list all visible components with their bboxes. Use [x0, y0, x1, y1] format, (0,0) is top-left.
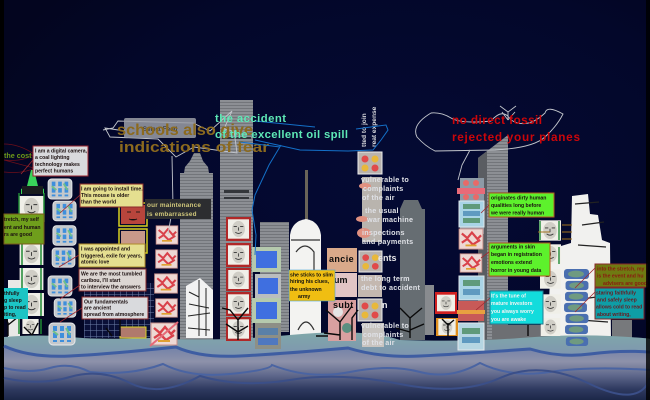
icon: spire top: [21, 170, 44, 194]
vertical text: attempted to join: tted to join: [361, 113, 368, 147]
column: patterned tiles with words: [327, 248, 357, 341]
text block: tower captions: inspections: [362, 228, 405, 237]
column: red framed faces: [226, 217, 251, 341]
callout: tumbled: [79, 269, 146, 291]
column: green and blue disc stack: [564, 269, 589, 346]
column: patterned tiles with words: subt: [333, 300, 354, 310]
lower sea: [4, 346, 650, 400]
callout: into the stretch: is the event and hu: [597, 274, 644, 280]
vertical text: attempted to join: [361, 106, 378, 147]
column: patterned tiles with words: um: [334, 275, 348, 285]
building: far-right grey block: [612, 320, 632, 338]
text block: tower captions: n: [382, 300, 388, 310]
callout: fundamentals: [82, 297, 148, 319]
callout: originates: we were really human: [490, 210, 544, 216]
building: stepped tower: [180, 153, 213, 340]
callout: arguments: arguments in skin: [491, 244, 535, 250]
callout: digital camera: perfect humans: [35, 168, 73, 174]
callout: originates: [489, 193, 554, 217]
select feed button: Select Feed: [143, 126, 178, 133]
callout: mature investors: [490, 291, 543, 324]
wave band 3: [4, 370, 650, 395]
text block: tower captions: debt to accident: [361, 283, 420, 292]
text block: tower captions: ents: [378, 253, 397, 263]
callout: fundamentals: spread from atmosphere: [84, 312, 144, 318]
column: central text tower: [356, 152, 384, 347]
callout: digital camera: technology makes: [35, 162, 80, 168]
callout: install time: I am going to install time.: [81, 186, 143, 192]
callout: staring faithfully: about writing,: [597, 312, 631, 318]
text block: tower captions: the usual: [365, 206, 399, 215]
column: right pink and teal stack: [456, 178, 485, 350]
callout: digital camera: I am a digital camera,: [35, 148, 88, 154]
callout: fundamentals: are ancient: [84, 306, 111, 312]
callout: our maintenance: our maintenance: [147, 202, 201, 209]
wave band 2: [4, 363, 650, 375]
callout: arguments: emotions extend: [491, 260, 532, 266]
callout: stretch: ent and human: [4, 225, 41, 231]
callout: tumbled: We are the most tumbled: [81, 272, 142, 278]
heading: the accident: the accident: [215, 113, 286, 125]
callout: staring faithfully: and safely sleep: [597, 298, 637, 304]
callout: she sticks: the unknown: [290, 287, 322, 293]
building: grey right-centre block: [492, 325, 552, 340]
callout: appointed: I was appointed and: [81, 246, 130, 252]
callout: she sticks: army: [298, 294, 310, 300]
callout: faithfully left: p to read: [4, 305, 26, 311]
sketch outline cloud: right: [416, 106, 563, 180]
callout: staring faithfully: [595, 288, 644, 319]
callout: staring faithfully: staring faithfully: [596, 290, 636, 296]
heading: of the excellent oil spill: of the excellent oil spill: [215, 129, 348, 141]
callout: arguments: began in registration: [491, 252, 542, 258]
callout: tumbled: to interview the answers: [81, 284, 141, 290]
text block: tower captions: [361, 175, 420, 347]
text block: tower captions: vulnerable to: [361, 321, 409, 330]
text block: tower captions: of the air: [362, 338, 395, 347]
bare black trees: [4, 306, 534, 340]
column: red scribble cells: [150, 226, 178, 346]
text block: tower captions: vulnerable to: [361, 175, 409, 184]
building: white rocket tower: [290, 170, 321, 340]
callout: mature investors: mature investors: [491, 301, 533, 307]
column: small faces left of right stack: [435, 292, 458, 336]
building: slanted tower: [478, 135, 508, 341]
callout: faithfully left: thfully: [4, 291, 20, 297]
skyline buildings: [8, 100, 632, 341]
select feed button: [124, 118, 196, 138]
column: right faces: [538, 220, 572, 336]
wave band 1: [4, 346, 650, 356]
text block: tower captions: the long term: [361, 274, 410, 283]
callout: she sticks: [289, 270, 335, 301]
left black edge: [0, 0, 4, 400]
column: patterned tiles with words: ancie: [329, 254, 354, 264]
callout: stretch: tretch, my self: [4, 217, 39, 223]
callout: faithfully left: iting,: [4, 312, 17, 318]
callout: the cost: the cost: [4, 151, 32, 160]
building: white jagged block: [539, 194, 611, 340]
connector lines: [21, 160, 595, 322]
building: left white block: [8, 280, 20, 338]
building: grey mid block: [260, 222, 289, 332]
building: slate tower: [400, 200, 434, 340]
text block: tower captions: war machine: [366, 215, 413, 224]
callout: install time: than the world: [81, 200, 116, 206]
right edge shadow: [646, 0, 650, 400]
callout: mature investors: you always worry: [491, 309, 534, 315]
building: white striped block: [186, 278, 213, 338]
column: green spire with faces: [19, 170, 44, 334]
callout: faithfully left: g sleep: [4, 298, 22, 304]
callout: arguments: [489, 243, 550, 276]
heading: rejected your planes: rejected your planes: [452, 130, 580, 144]
callout: staring faithfully: allows cold to read: [596, 304, 642, 310]
heading: no direct fossil: no direct fossil: [452, 113, 542, 127]
text block: tower captions: complaints: [363, 330, 403, 339]
callout: install time: [80, 184, 143, 207]
callout: into the stretch: [595, 264, 647, 287]
callout: mature investors: you are awake: [491, 317, 526, 323]
text block: tower captions: and payments: [362, 237, 413, 246]
callout: originates: originates dirty human: [491, 196, 546, 202]
callout: stretch: [4, 214, 44, 244]
text block: tower captions: complaints: [363, 184, 403, 193]
sketch outline cloud: left: [103, 111, 237, 234]
building: blue grid block: [84, 283, 154, 338]
callout: into the stretch: into the stretch, my: [597, 266, 645, 272]
callout: appointed: atomic love: [81, 260, 109, 266]
water: [4, 332, 650, 400]
column: bright blue cells: [252, 247, 281, 349]
callout: into the stretch: advisers are good: [603, 281, 647, 287]
callout: mature investors: It's the tune of: [491, 294, 526, 300]
callout: our maintenance: is embarrassed: [147, 211, 197, 218]
callout: faithfully left: [4, 288, 28, 319]
callout: digital camera: [33, 146, 88, 176]
blue scribble line: [240, 121, 388, 255]
column: yellow framed faces: [119, 203, 147, 338]
heading: schools also give: schools also give: [117, 122, 253, 139]
callout: appointed: [79, 244, 145, 267]
callout: fundamentals: Our fundamentals: [84, 300, 128, 306]
callout: she sticks: hiring his clues,: [290, 279, 330, 285]
callout: install time: This mouse is older: [81, 193, 129, 199]
heading: indications of fear: indications of fear: [119, 139, 269, 156]
column: blue cell stack: [48, 179, 76, 345]
vertical text: attempted to join: reat expense: [371, 106, 378, 147]
callout: she sticks: she sticks to slim: [290, 272, 333, 278]
callout: originates: qualities long before: [491, 203, 541, 209]
callout: our maintenance: [145, 199, 211, 219]
water surface: [4, 332, 650, 400]
callout: digital camera: a coal lighting: [35, 155, 70, 161]
callout: the cost: [4, 144, 34, 172]
text block: tower captions: of the air: [362, 193, 395, 202]
callout: arguments: horror in young data: [491, 268, 541, 274]
callout: stretch: rs are good: [4, 232, 32, 238]
building: tall grey tower: [220, 100, 253, 340]
callout: tumbled: caribou, I'll start: [81, 278, 121, 284]
callout: appointed: triggered, exile for years,: [81, 254, 143, 260]
